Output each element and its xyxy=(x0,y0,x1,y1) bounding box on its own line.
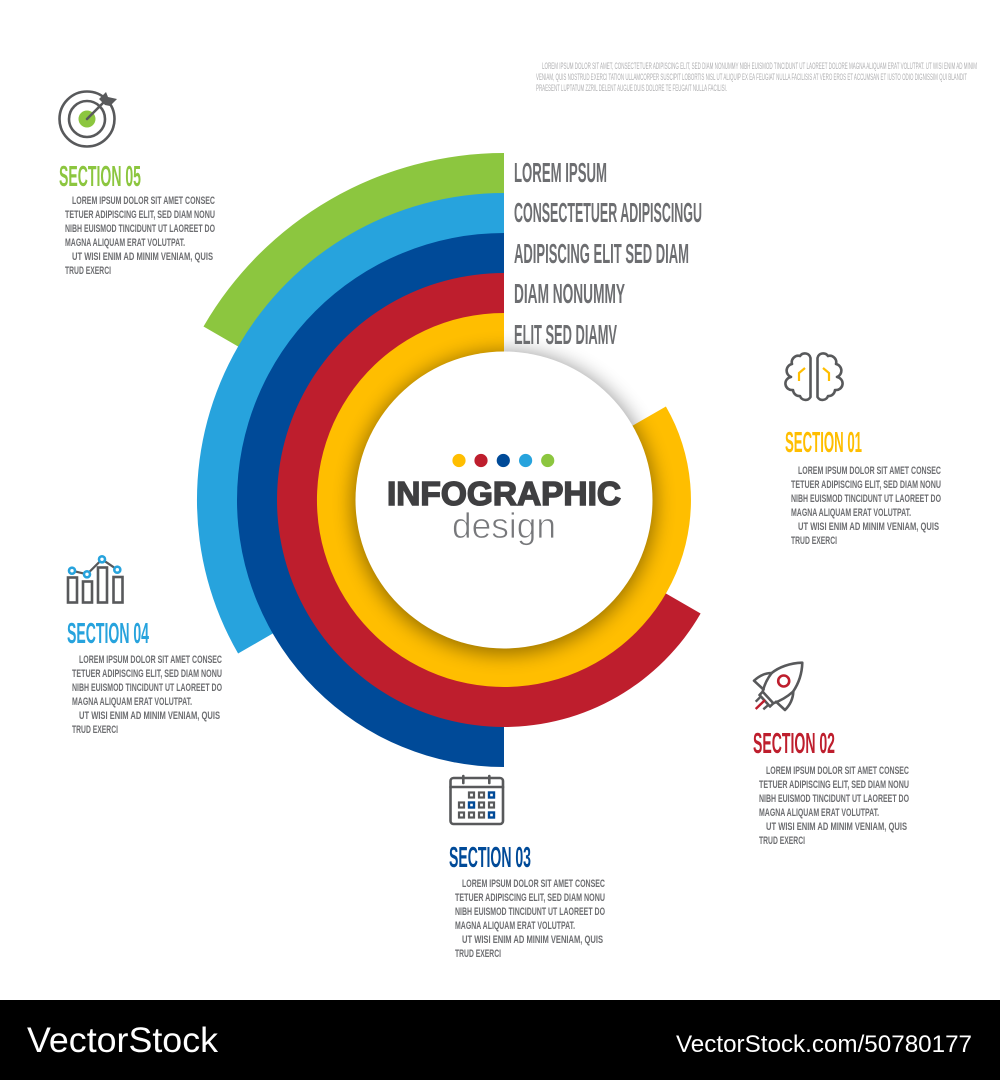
body text: NIBH EUISMOD TINCIDUNT UT LAOREET DO xyxy=(65,223,215,235)
icon: calendar xyxy=(450,776,503,824)
body text xyxy=(759,765,909,847)
icon: target xyxy=(60,92,117,146)
body text: UT WISI ENIM AD MINIM VENIAM, QUIS xyxy=(766,821,907,833)
ring labels: DIAM NONUMMY xyxy=(514,278,625,309)
panel: section 05: SECTION 05 xyxy=(59,161,141,193)
heading: infographic: INFOGRAPHIC xyxy=(387,476,621,513)
body text: LOREM IPSUM DOLOR SIT AMET CONSEC xyxy=(766,765,909,777)
body text: NIBH EUISMOD TINCIDUNT UT LAOREET DO xyxy=(455,906,605,918)
body text: TETUER ADIPISCING ELIT, SED DIAM NONU xyxy=(65,209,215,221)
body text: LOREM IPSUM DOLOR SIT AMET CONSEC xyxy=(462,878,605,890)
circular chart xyxy=(197,153,701,767)
panel: section 04 xyxy=(67,556,222,736)
body text: TRUD EXERCI xyxy=(455,948,501,960)
body text: TRUD EXERCI xyxy=(759,835,805,847)
icon: brain xyxy=(785,353,843,400)
subheading: design: design xyxy=(452,505,556,546)
colour dots xyxy=(452,454,554,467)
panel: section 05 xyxy=(59,92,215,277)
body text: LOREM IPSUM DOLOR SIT AMET CONSEC xyxy=(72,195,215,207)
panel: section 01: SECTION 01 xyxy=(785,427,862,459)
body text: UT WISI ENIM AD MINIM VENIAM, QUIS xyxy=(798,521,939,533)
body text xyxy=(65,195,215,277)
panel: section 02: SECTION 02 xyxy=(753,728,835,760)
panel: section 03: SECTION 03 xyxy=(449,842,531,874)
footer bar xyxy=(0,1000,1000,1080)
text: CONSECTETUER ADIPISCINGU xyxy=(514,197,702,228)
top paragraph: PRAESENT LUPTATUM ZZRIL DELENT AUGUE DUIS DOLORE TE FEUGAIT NULLA FACILISI. xyxy=(536,83,727,93)
ring labels: ELIT SED DIAMV xyxy=(514,319,617,350)
body text: UT WISI ENIM AD MINIM VENIAM, QUIS xyxy=(72,251,213,263)
ring: light blue xyxy=(197,193,504,654)
body text: MAGNA ALIQUAM ERAT VOLUTPAT. xyxy=(65,237,185,249)
body text: NIBH EUISMOD TINCIDUNT UT LAOREET DO xyxy=(759,793,909,805)
body text xyxy=(72,654,222,736)
body text: TRUD EXERCI xyxy=(72,724,118,736)
panel: section 04: SECTION 04 xyxy=(67,618,149,650)
ring labels: LOREM IPSUM xyxy=(514,157,607,188)
body text: TRUD EXERCI xyxy=(791,535,837,547)
body text: MAGNA ALIQUAM ERAT VOLUTPAT. xyxy=(72,696,192,708)
body text: TETUER ADIPISCING ELIT, SED DIAM NONU xyxy=(72,668,222,680)
panel: section 02 xyxy=(753,663,909,847)
body text: TRUD EXERCI xyxy=(65,265,111,277)
footer reference: VectorStock.com/50780177 xyxy=(676,1031,972,1058)
icon: rocket xyxy=(754,663,802,710)
body text: NIBH EUISMOD TINCIDUNT UT LAOREET DO xyxy=(72,682,222,694)
body text: TETUER ADIPISCING ELIT, SED DIAM NONU xyxy=(759,779,909,791)
panel: section 01 xyxy=(785,353,941,547)
body text: UT WISI ENIM AD MINIM VENIAM, QUIS xyxy=(79,710,220,722)
ring: red xyxy=(277,273,701,727)
body text: LOREM IPSUM DOLOR SIT AMET CONSEC xyxy=(79,654,222,666)
ring: green xyxy=(204,153,504,347)
body text xyxy=(455,878,605,960)
ring labels xyxy=(514,157,702,350)
body text: UT WISI ENIM AD MINIM VENIAM, QUIS xyxy=(462,934,603,946)
top paragraph xyxy=(536,61,977,93)
ring labels: ADIPISCING ELIT SED DIAM xyxy=(514,238,689,269)
body text: MAGNA ALIQUAM ERAT VOLUTPAT. xyxy=(791,507,911,519)
centre disc shadow xyxy=(353,352,655,654)
ring: yellow xyxy=(317,313,691,687)
centre disc xyxy=(356,352,652,648)
centre title xyxy=(387,454,621,546)
body text: TETUER ADIPISCING ELIT, SED DIAM NONU xyxy=(455,892,605,904)
icon: bar chart xyxy=(68,556,122,602)
footer brand: VectorStock xyxy=(27,1021,219,1060)
panel: section 03 xyxy=(449,776,605,960)
body text xyxy=(791,465,941,547)
ring: dark blue xyxy=(237,233,504,767)
body text: MAGNA ALIQUAM ERAT VOLUTPAT. xyxy=(759,807,879,819)
body text: MAGNA ALIQUAM ERAT VOLUTPAT. xyxy=(455,920,575,932)
